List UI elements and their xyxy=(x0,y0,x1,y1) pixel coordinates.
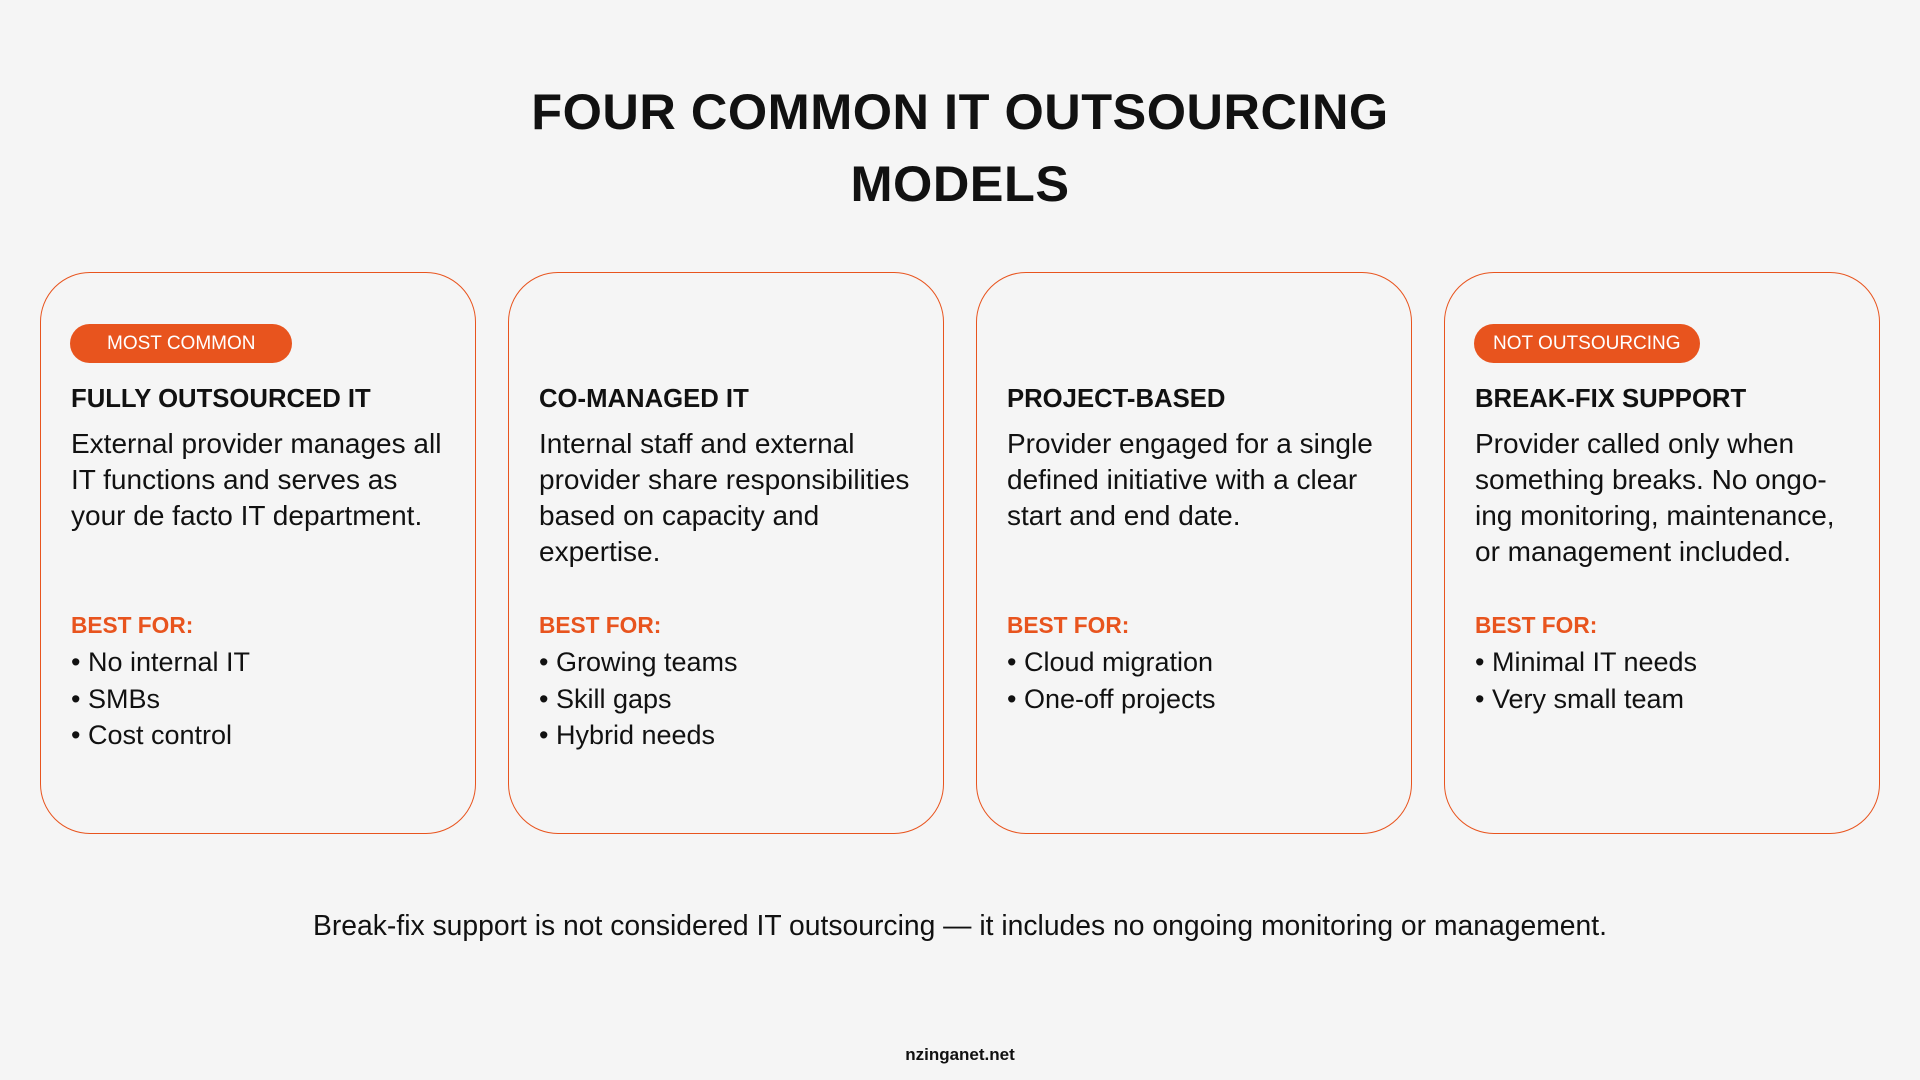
best for list: • Minimal IT needs xyxy=(1475,647,1697,677)
heading: FULLY OUTSOURCED IT xyxy=(71,385,371,413)
best for list xyxy=(1475,647,1697,714)
panel: fully outsourced IT xyxy=(40,272,476,834)
description: defined initiative with a clear xyxy=(1007,464,1357,495)
panel: project-based xyxy=(976,272,1412,834)
best for list: • One-off projects xyxy=(1007,684,1216,714)
description: your de facto IT department. xyxy=(71,500,422,531)
best for list: • Cloud migration xyxy=(1007,647,1213,677)
description xyxy=(1007,428,1373,531)
best for list: • Very small team xyxy=(1475,684,1684,714)
best for label: BEST FOR: xyxy=(71,612,193,638)
description: provider share responsibilities xyxy=(539,464,909,495)
description: start and end date. xyxy=(1007,500,1241,531)
description: something breaks. No ongo- xyxy=(1475,464,1827,495)
description xyxy=(71,428,441,531)
title xyxy=(531,83,1389,212)
panel: break-fix support xyxy=(1444,272,1880,834)
description: Provider called only when xyxy=(1475,428,1794,459)
description: expertise. xyxy=(539,536,660,567)
best for list xyxy=(1007,647,1216,714)
best for list: • SMBs xyxy=(71,684,160,714)
best for label: BEST FOR: xyxy=(539,612,661,638)
best for label: BEST FOR: xyxy=(1007,612,1129,638)
best for list: • Hybrid needs xyxy=(539,720,715,750)
best for list: • Skill gaps xyxy=(539,684,672,714)
title: FOUR COMMON IT OUTSOURCING xyxy=(531,83,1389,140)
description: Internal staff and external xyxy=(539,428,854,459)
description: Provider engaged for a single xyxy=(1007,428,1373,459)
best for list: • No internal IT xyxy=(71,647,250,677)
badge: not outsourcing: NOT OUTSOURCING xyxy=(1493,333,1681,354)
best for label: BEST FOR: xyxy=(1475,612,1597,638)
badge: most common xyxy=(70,324,292,363)
best for list: • Growing teams xyxy=(539,647,738,677)
badge: not outsourcing xyxy=(1474,324,1700,363)
badge: most common: MOST COMMON xyxy=(107,333,255,354)
panel: co-managed IT xyxy=(508,272,944,834)
source: nzinganet.net xyxy=(905,1045,1015,1064)
heading: BREAK-FIX SUPPORT xyxy=(1475,385,1746,413)
description xyxy=(539,428,909,567)
title: MODELS xyxy=(850,155,1070,212)
description xyxy=(1475,428,1835,567)
description: based on capacity and xyxy=(539,500,819,531)
description: External provider manages all xyxy=(71,428,441,459)
description: ing monitoring, maintenance, xyxy=(1475,500,1835,531)
description: IT functions and serves as xyxy=(71,464,397,495)
description: or management included. xyxy=(1475,536,1791,567)
best for list xyxy=(71,647,250,750)
heading: PROJECT-BASED xyxy=(1007,385,1225,413)
heading: CO-MANAGED IT xyxy=(539,385,749,413)
footnote: Break-fix support is not considered IT outsourcing — it includes no ongoing monitoring or management. xyxy=(313,909,1607,941)
best for list: • Cost control xyxy=(71,720,232,750)
best for list xyxy=(539,647,738,750)
